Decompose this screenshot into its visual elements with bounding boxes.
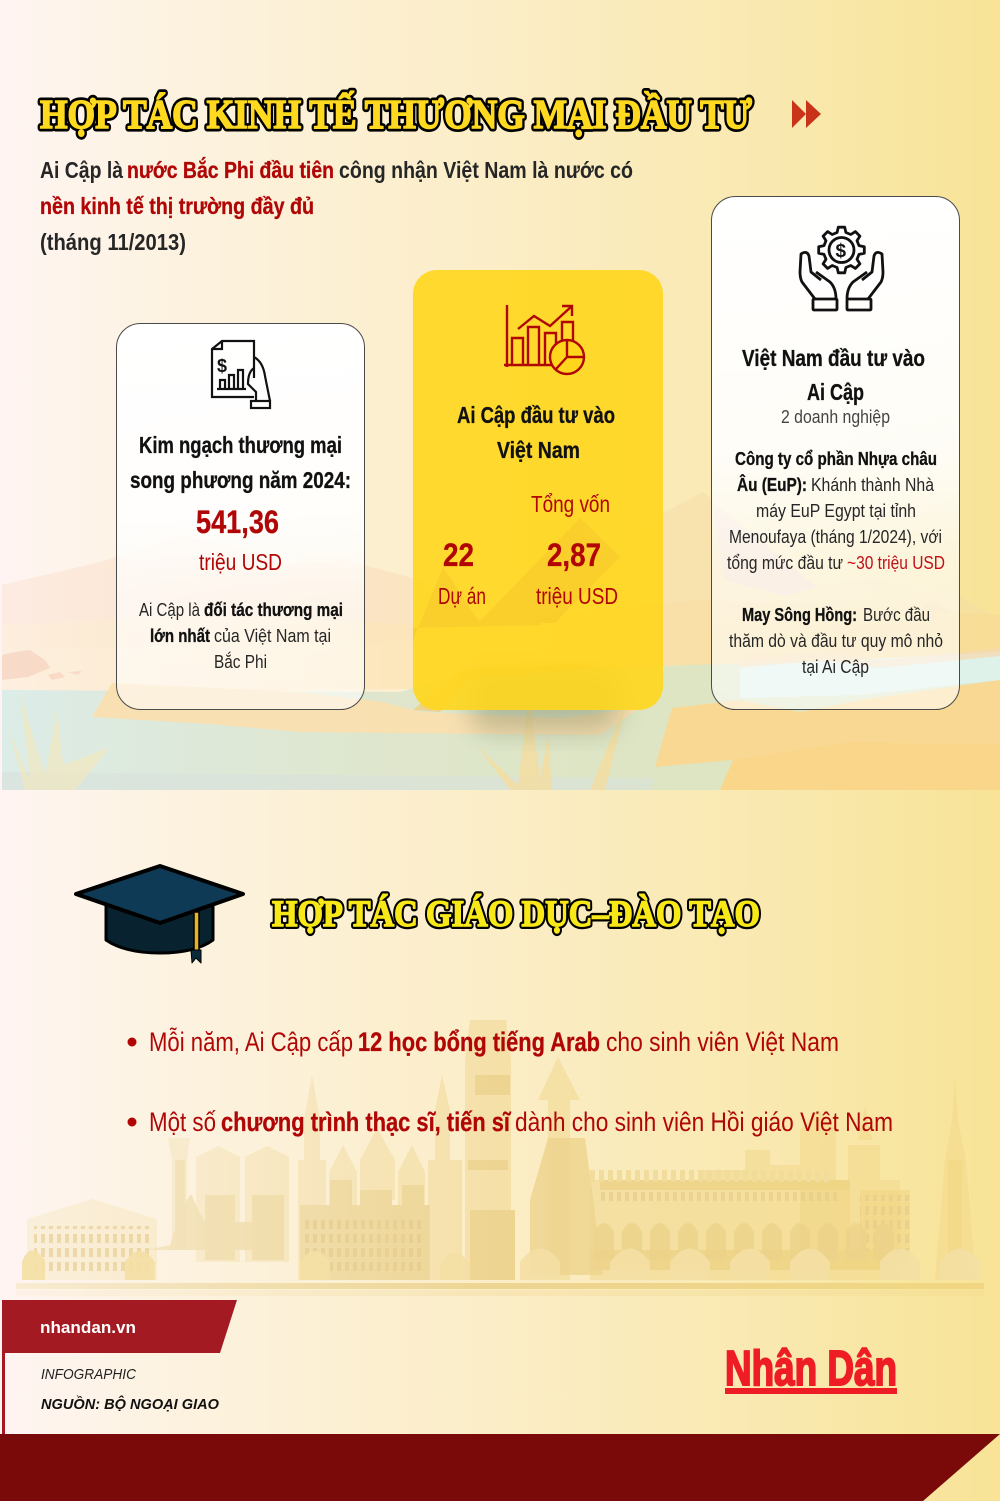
- intro text: công nhận Việt Nam là nước có: [339, 157, 633, 183]
- footer ribbon: website: nhandan.vn: [40, 1319, 136, 1337]
- text block: May Song Hong: tại Ai Cập: [802, 657, 869, 677]
- description: đối tác thương mại: [204, 600, 343, 620]
- bullet: scholarships: Mỗi năm, Ai Cập cấp: [149, 1026, 353, 1057]
- heading: Vietnam invests: [742, 345, 925, 405]
- bullet: postgraduate programmes: [128, 1107, 893, 1137]
- text block: EuP: Âu (EuP):: [737, 474, 807, 495]
- value: 541,36: 541,36: [196, 504, 279, 540]
- icon: hands holding gear: [800, 227, 883, 310]
- text block: May Song Hong: [729, 605, 943, 677]
- heading: trade: [130, 432, 351, 493]
- text block: EuP: máy EuP Egypt tại tỉnh: [756, 501, 916, 521]
- intro text: (tháng 11/2013): [40, 229, 186, 255]
- description: của Việt Nam tại: [214, 626, 331, 646]
- text block: EuP: Menoufaya (tháng 1/2024), với: [729, 527, 942, 547]
- icon: document with hand: $: [217, 356, 227, 376]
- heading: education cooperation: HỢP TÁC GIÁO DỤC–ĐÀO TẠO: [272, 893, 760, 935]
- intro text: nước Bắc Phi đầu tiên: [127, 156, 334, 183]
- unit: triệu USD: [199, 549, 282, 575]
- credits: INFOGRAPHIC: [41, 1366, 136, 1383]
- logo: Nhan Dan: Nhân Dân: [725, 1342, 897, 1396]
- panel: Egypt invests in Vietnam: [413, 270, 663, 710]
- bullet: postgraduate programmes: chương trình thạc sĩ, tiến sĩ: [221, 1107, 511, 1137]
- panel: Vietnam invests in Egypt: [712, 196, 960, 710]
- heading: Egypt invests: Việt Nam: [497, 437, 580, 463]
- description: [139, 600, 343, 672]
- bullet: scholarships: 12 học bổng tiếng Arab: [358, 1027, 600, 1057]
- illustration: Cairo city skyline: [16, 1020, 984, 1296]
- illustration: Egyptian desert landscape: [2, 492, 1000, 790]
- icon: document with hand: [212, 341, 270, 408]
- heading: trade: Kim ngạch thương mại: [139, 432, 342, 458]
- bullet: scholarships: cho sinh viên Việt Nam: [606, 1027, 839, 1057]
- value: 2,87 million USD: triệu USD: [536, 583, 618, 609]
- heading: Vietnam invests: Việt Nam đầu tư vào: [742, 345, 925, 371]
- text block: EuP: tổng mức đầu tư: [727, 553, 843, 573]
- intro text: Ai Cập là: [40, 157, 123, 183]
- icon: double arrow: [792, 100, 821, 128]
- description: Bắc Phi: [214, 651, 267, 672]
- intro text: nền kinh tế thị trường đầy đủ: [40, 193, 314, 219]
- heading: trade: song phương năm 2024:: [130, 467, 351, 493]
- panel: bilateral trade: [116, 324, 364, 710]
- heading: Egypt invests: [457, 402, 615, 463]
- value: 22 projects: [438, 537, 486, 609]
- value: 2,87 million USD: [536, 537, 618, 609]
- text block: EuP: Khánh thành Nhà: [811, 475, 935, 495]
- icon: graduation cap: [76, 866, 243, 963]
- title: economic cooperation: HỢP TÁC KINH TẾ THƯƠNG MẠI ĐẦU TƯ: [40, 91, 752, 137]
- value: 22 projects: Dự án: [438, 583, 486, 609]
- text block: EuP: Công ty cổ phần Nhựa châu: [735, 449, 937, 469]
- title: economic cooperation: HỢP TÁC KINH TẾ THƯƠNG MẠI ĐẦU TƯ: [40, 91, 752, 137]
- text block: EuP: ~30 triệu USD: [847, 553, 945, 573]
- text block: May Song Hong: Bước đầu: [863, 605, 930, 625]
- bullet: postgraduate programmes: Một số: [149, 1107, 216, 1137]
- text block: EuP: [727, 449, 945, 573]
- bullet: scholarships: [128, 1026, 839, 1057]
- intro text: [40, 156, 633, 255]
- credits: [41, 1366, 219, 1413]
- bullet: postgraduate programmes: dành cho sinh viên Hồi giáo Việt Nam: [515, 1107, 893, 1137]
- icon: chart: [504, 305, 584, 374]
- footer ribbon: website: [2, 1300, 237, 1434]
- description: Ai Cập là: [139, 600, 201, 620]
- footer bar: [0, 1434, 1000, 1501]
- value: 2,87 million USD: 2,87: [547, 537, 601, 573]
- subheading: 2 enterprises: 2 doanh nghiệp: [781, 407, 890, 427]
- heading: Vietnam invests: Ai Cập: [807, 379, 864, 405]
- heading: Egypt invests: Ai Cập đầu tư vào: [457, 402, 615, 428]
- heading: education cooperation: HỢP TÁC GIÁO DỤC–ĐÀO TẠO: [272, 893, 760, 935]
- credits: NGUỒN: BỘ NGOẠI GIAO: [41, 1395, 219, 1413]
- description: lớn nhất: [150, 626, 210, 646]
- label: total capital: Tổng vốn: [531, 491, 610, 517]
- icon: hands holding gear: $: [836, 241, 846, 262]
- text block: May Song Hong: May Sông Hồng:: [742, 605, 857, 625]
- text block: May Song Hong: thăm dò và đầu tư quy mô nhỏ: [729, 631, 943, 651]
- shadow of yellow panel: [470, 670, 620, 732]
- value: 22 projects: 22: [443, 537, 474, 573]
